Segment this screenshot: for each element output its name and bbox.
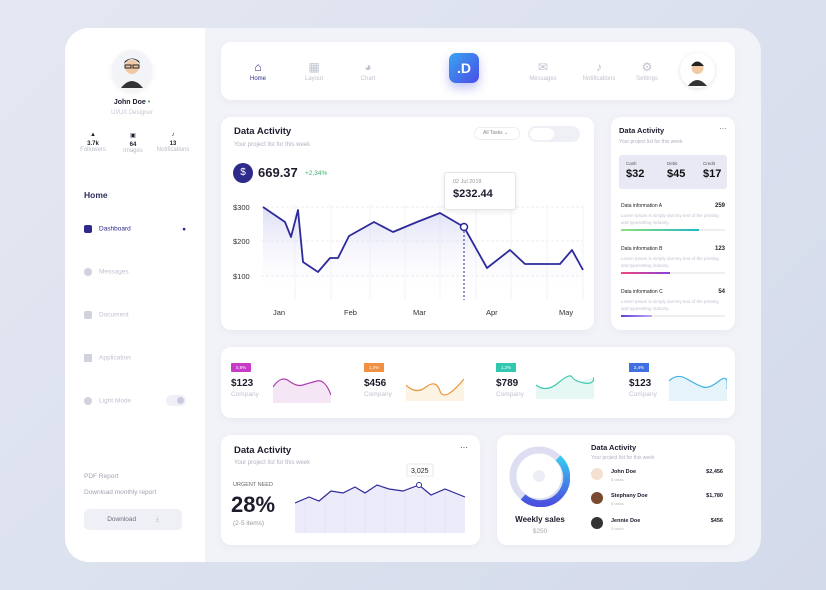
menu: Messages: [99, 269, 129, 276]
nav bar: Settings: [636, 76, 658, 82]
pdf report: [84, 473, 156, 496]
profile avatar: [112, 50, 152, 90]
bottom right card: 3 tasks: [611, 526, 624, 531]
mini stats row: [221, 347, 735, 418]
filter controls: [474, 127, 520, 140]
nav bar: Layout: [305, 76, 323, 82]
stat 4: Company: [629, 391, 657, 398]
stat 3: Company: [496, 391, 524, 398]
line chart: May: [559, 308, 573, 317]
nav bar: ✉: [538, 60, 548, 74]
bottom right card: $2,456: [706, 469, 723, 475]
bottom right card: $250: [533, 528, 547, 535]
right data card: Data information B: [621, 246, 662, 252]
right data card: Data information A: [621, 203, 662, 209]
pdf report: PDF Report: [84, 473, 118, 480]
donut: [510, 446, 570, 507]
nav bar: ◕: [364, 60, 372, 74]
nav avatar: [680, 53, 715, 88]
line chart: [233, 203, 584, 317]
stat 4: $123: [629, 378, 651, 389]
bottom right card: John Doe: [611, 469, 636, 475]
stat 3: [496, 363, 594, 399]
cash debit credit: Cash: [626, 161, 637, 166]
right data card: 123: [715, 246, 725, 252]
menu: ●: [182, 226, 186, 233]
cash debit credit: Credit: [703, 161, 715, 166]
stats: ▲: [90, 132, 96, 138]
home heading: Home: [84, 190, 108, 200]
main chart card: Your project list for this week: [234, 142, 310, 148]
stat 1: 0,8%: [236, 365, 246, 370]
bottom left card: 28%: [231, 492, 275, 517]
right data card: Lorem Ipsum is simply dummy text of the printing and typesetting industry.: [621, 256, 719, 268]
stat 1: Company: [231, 391, 259, 398]
profile name: John Doe •: [114, 99, 150, 106]
nav bar: ⚙: [642, 60, 652, 74]
bottom right card: Weekly sales: [515, 515, 565, 524]
main chart card: +2,34%: [305, 170, 327, 177]
right data card: Data Activity: [619, 126, 664, 135]
line chart: $200: [233, 237, 250, 246]
tooltip: $232.44: [453, 188, 493, 200]
nav items: [250, 60, 266, 82]
stat 2: Company: [364, 391, 392, 398]
stat 4: 2,4%: [634, 365, 644, 370]
cash debit credit: $17: [703, 168, 721, 180]
stats: 3.7k: [87, 141, 99, 147]
stats: ▣: [130, 133, 136, 139]
stats: 64: [130, 142, 136, 148]
bottom right card: 8 tasks: [611, 477, 624, 482]
people list: Data Activity: [591, 443, 636, 452]
nav bar: Notifications: [583, 76, 615, 82]
right data card: Data information C: [621, 289, 663, 295]
bottom right card: Your project list for this week: [591, 455, 654, 461]
bottom right card: $456: [711, 518, 723, 524]
cash debit credit: $45: [667, 168, 685, 180]
main chart card: 669.37: [258, 165, 298, 180]
stat 3: 1,2%: [501, 365, 511, 370]
bottom right card: Jennie Doe: [611, 518, 640, 524]
bottom left card: Data Activity: [234, 445, 291, 456]
right data card: Your project list for this week: [619, 139, 682, 145]
stat 3: $789: [496, 378, 518, 389]
logo: [449, 53, 479, 83]
download button: [84, 509, 182, 530]
stats: ♪: [172, 132, 174, 138]
download button: Download ⤓: [107, 516, 159, 523]
stats: Images: [123, 148, 143, 154]
balance: $: [240, 167, 246, 178]
sidebar: [65, 28, 205, 562]
bottom right card: 6 tasks: [611, 501, 624, 506]
menu: Dashboard: [99, 226, 131, 233]
area chart: 3,025: [411, 468, 429, 475]
line chart: $300: [233, 203, 250, 212]
bottom right card: Stephany Doe: [611, 493, 648, 499]
tooltip: 02 Jul 2018: [453, 179, 481, 185]
nav bar: [221, 42, 735, 100]
tooltip: [444, 172, 516, 210]
main frame: [65, 28, 761, 562]
profile role: UI/UX Designer: [111, 110, 153, 116]
stats: 13: [170, 141, 176, 147]
filter controls: All Tasks ⌄: [483, 130, 508, 136]
nav bar: ▦: [308, 60, 320, 74]
menu: Application: [99, 355, 131, 362]
bottom left card: ···: [460, 443, 468, 452]
line chart: Feb: [344, 308, 357, 317]
menu: [84, 225, 186, 406]
stat 2: 1,4%: [369, 365, 379, 370]
chart title: Data Activity: [234, 126, 291, 137]
stats: Followers: [80, 147, 106, 153]
area chart: [295, 464, 466, 533]
stat 2: $456: [364, 378, 386, 389]
bottom right card: [497, 435, 735, 545]
nav items: Home: [250, 76, 266, 82]
logo: .D: [457, 60, 471, 76]
nav items: ⌂: [254, 60, 262, 74]
right data card: ···: [719, 124, 727, 133]
main chart card: [221, 117, 594, 330]
right data card: 54: [718, 289, 725, 295]
bottom right card: $1,780: [706, 493, 723, 499]
cash debit credit: $32: [626, 168, 644, 180]
nav bar: Messages: [529, 76, 557, 82]
urgent stat: URGENT NEED: [233, 482, 273, 488]
line chart: Jan: [273, 308, 285, 317]
balance: [233, 163, 253, 183]
bottom left card: Your project list for this week: [234, 460, 310, 466]
line chart: $100: [233, 272, 250, 281]
pdf report: Download monthly report: [84, 489, 156, 496]
stat 4: [629, 363, 727, 401]
stats: [80, 132, 190, 154]
nav bar: Chart: [361, 76, 375, 82]
info items: [621, 202, 725, 317]
bottom left card: (2-5 items): [233, 520, 264, 527]
nav bar: ♪: [596, 60, 602, 74]
line chart: Mar: [413, 308, 426, 317]
stat 1: [231, 363, 331, 403]
right data card: 259: [715, 203, 725, 209]
line chart: Apr: [486, 308, 498, 317]
cash debit credit: Debit: [667, 161, 678, 166]
menu: Document: [99, 312, 129, 319]
right data card: Lorem Ipsum is simply dummy text of the printing and typesetting industry.: [621, 213, 719, 225]
right data card: [611, 117, 735, 330]
stats: Notifications: [157, 147, 189, 153]
bottom left card: [221, 435, 480, 545]
cash debit credit: [619, 155, 727, 189]
stat 2: [364, 363, 464, 401]
menu: Light Mode: [99, 398, 131, 405]
stat 1: $123: [231, 378, 253, 389]
right data card: Lorem Ipsum is simply dummy text of the printing and typesetting industry.: [621, 299, 719, 311]
